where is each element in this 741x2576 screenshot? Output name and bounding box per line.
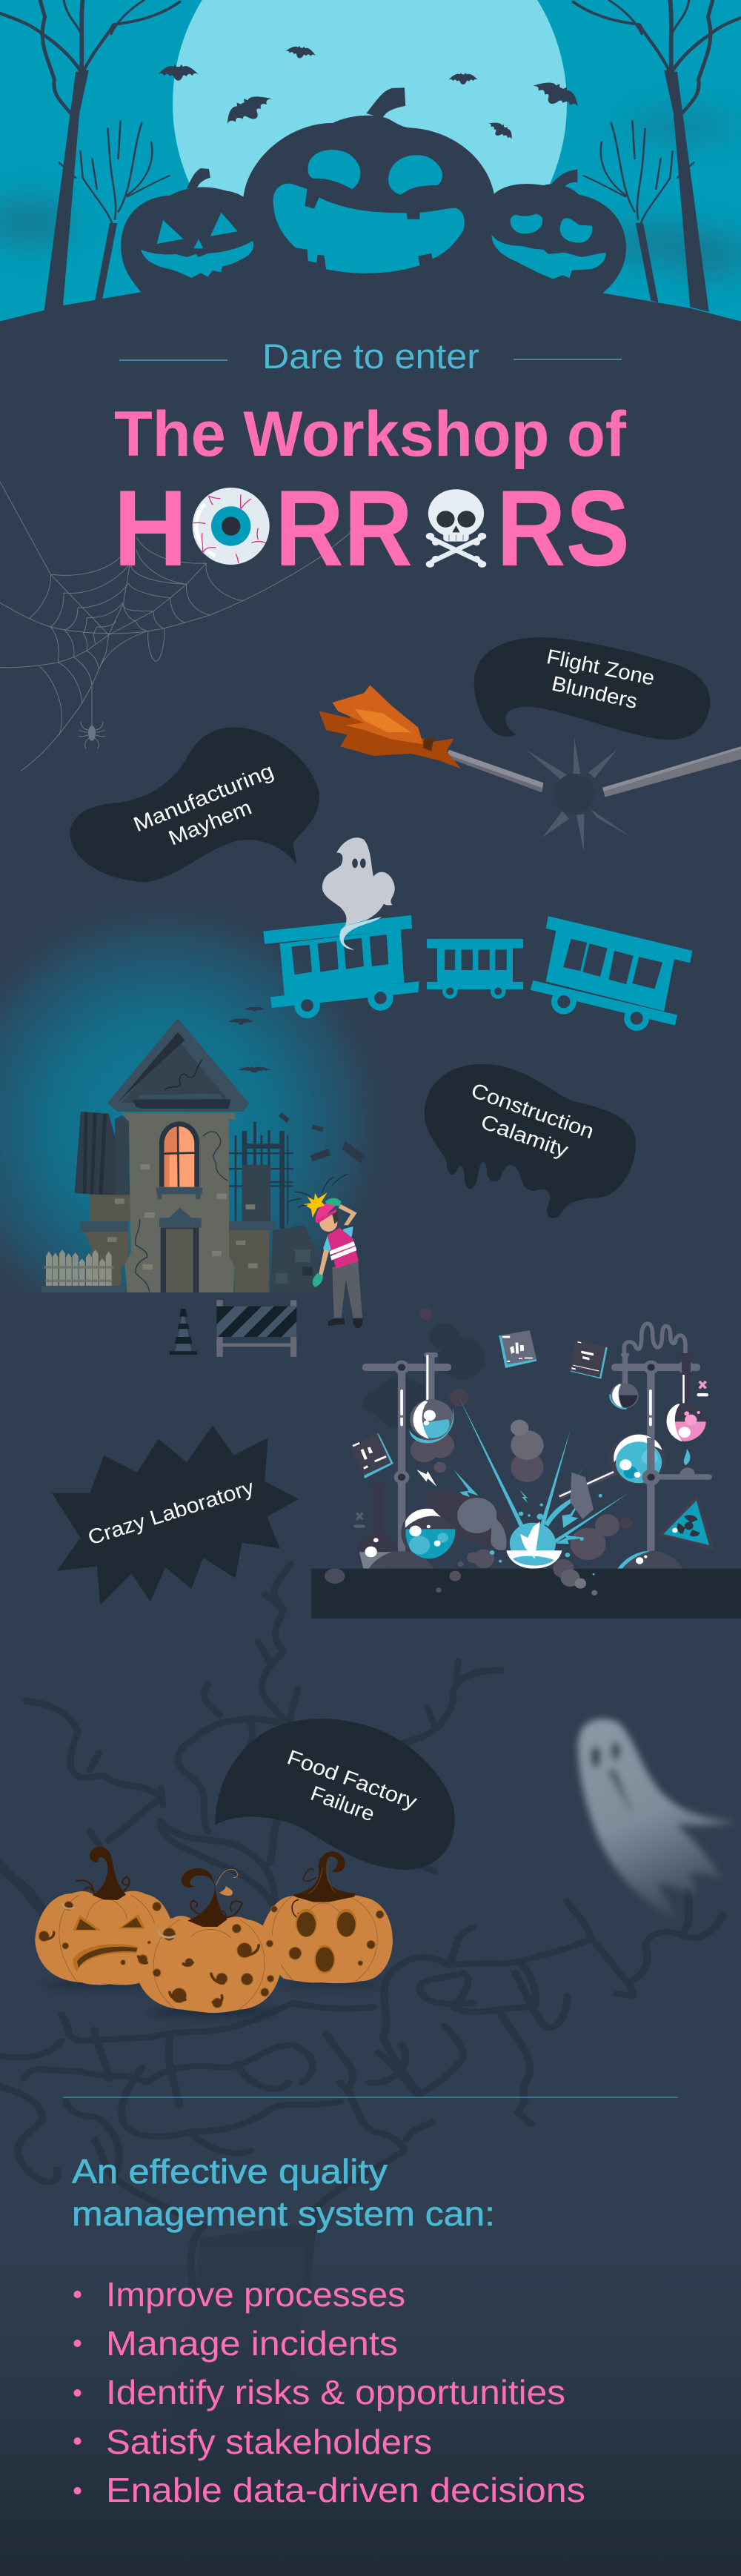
bubble: Flight Zone Blunders: Flight Zone [545,645,657,690]
exploding laboratory [311,1308,741,1619]
broken flask shape [425,1473,594,1550]
benefits list [74,2275,585,2509]
sky mist [0,116,741,278]
exploding beaker [490,1494,602,1569]
bubble: Food Factory Failure: Food Factory [285,1745,420,1813]
background: faint tree trunk [171,2223,311,2460]
sideways flask [559,1433,665,1497]
small grey flask [610,1353,639,1409]
bubble: Food Factory Failure: Failure [308,1782,378,1826]
lilac smoke [411,1308,633,1568]
title line: The Workshop of: The Workshop of [114,399,626,470]
letters RS: RS [496,468,630,588]
spider [79,721,105,749]
picket fence [41,1249,127,1292]
bubble: Manufacturing Mayhem [70,727,319,882]
letter H: H [113,468,187,588]
blurred ghost [578,1719,736,1921]
hill [0,280,741,340]
angry pumpkin [35,1847,176,1985]
shocked pumpkin [258,1851,393,1983]
title word: HORRORS with eyeball and skull [113,468,630,588]
bubble: Construction Calamity [425,1064,636,1218]
left blue flask [409,1352,453,1443]
collapsing house scene [41,1006,365,1357]
bullet: satisfy stakeholders: Satisfy stakeholders [106,2423,432,2461]
roof [107,1018,249,1112]
bubble: Manufacturing Mayhem: Mayhem [165,796,255,850]
broom [319,685,543,792]
rubble pile [270,1225,319,1292]
moon [173,0,567,301]
scaffolding [228,1122,293,1229]
right pumpkin [491,170,626,293]
bullet: manage incidents: Manage incidents [106,2324,398,2363]
right large tree [574,0,741,312]
cart middle [427,939,523,997]
flight and train section [70,637,741,1218]
left small tree [59,121,169,302]
right small tree [584,121,694,302]
pink flask [665,1353,708,1441]
right dome [618,1551,682,1569]
falling bricks [279,1112,365,1163]
intro line: Dare to enter: Dare to enter [262,336,479,376]
bullet: identify risks: Identify risks & opportunities [106,2373,565,2411]
left teal flask [401,1507,457,1558]
closing heading: An effective quality [72,2152,388,2191]
left pumpkin [121,168,258,293]
dark dome left [369,1551,433,1569]
dark smoke clouds [362,1323,485,1429]
closing heading: management system can: [72,2194,495,2233]
spider web [0,482,356,771]
construction glow [0,918,371,1292]
cart right [531,916,692,1028]
small bats [228,1006,272,1072]
wormy pumpkin [136,1868,281,2013]
lower panels [52,1425,455,1870]
construction worker [288,1175,362,1328]
food factory pumpkins [35,1847,393,2017]
bubble: Manufacturing Mayhem: Manufacturing [130,759,276,836]
bubble: Crazy Laboratory [52,1425,299,1605]
bubble: Flight Zone Blunders: Blunders [550,671,639,713]
smoke on bench [325,1559,597,1596]
pumpkin shadows [44,1981,380,2017]
background: twisted tree roots [0,1564,723,2297]
closing heading [72,2152,495,2233]
white spark [416,1470,436,1487]
cart left [263,915,419,1015]
flying lab sheets [350,1330,608,1478]
bats [158,44,585,143]
bubble: Crazy Laboratory: Crazy Laboratory [85,1475,256,1549]
striped road barrier [216,1300,296,1357]
burner [680,1449,695,1474]
lab bench [311,1569,741,1619]
letters RR: RR [275,468,413,588]
explosion beams [453,1398,629,1544]
house tower wall [122,1113,235,1292]
bubble: Construction Calamity: Construction [468,1078,597,1143]
bubble: Food Factory Failure [215,1719,455,1870]
bubble: Flight Zone Blunders [474,637,710,740]
front stand post over sideways flask [642,1438,712,1485]
center pumpkin [236,87,501,295]
stands [362,1361,712,1551]
left large tree [0,0,179,312]
header scene [0,0,741,340]
bullet: data-driven decisions: Enable data-driven decisions [106,2471,585,2509]
side walls [75,1112,275,1292]
left dark flask [353,1484,398,1569]
bullet: improve processes: Improve processes [106,2275,405,2314]
arched window [156,1121,202,1199]
trees and pumpkins silhouettes [0,0,741,340]
bubble: Construction Calamity: Calamity [478,1110,571,1162]
bottom gradient [0,2223,741,2576]
divider line [63,2097,678,2098]
ghost on train [322,837,395,950]
coiled tube [624,1324,685,1356]
traffic cone [170,1309,197,1355]
skull and crossbones letter O [426,489,486,568]
night sky [0,0,741,333]
eyeball letter O [193,488,270,565]
radiation warning triangle [659,1495,714,1550]
door [159,1207,202,1292]
wall bricks and cracks [136,1132,227,1292]
impact burst with broken handle [526,737,741,852]
